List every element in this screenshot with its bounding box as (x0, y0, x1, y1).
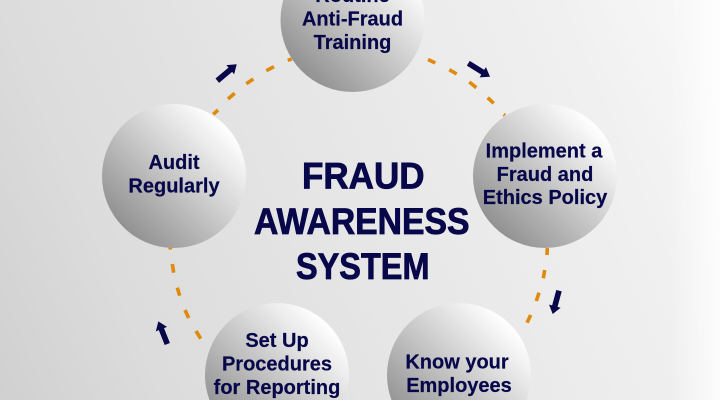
node: routine anti-fraud training (280, 0, 424, 92)
node: audit regularly: Audit (148, 152, 200, 174)
node: implement policy: Ethics Policy (483, 187, 608, 209)
node: implement policy: Implement a (486, 140, 603, 162)
title: FRAUD (302, 156, 424, 196)
node: set up procedures: for Reporting (214, 377, 340, 399)
dashed cycle ring (170, 59, 547, 339)
node: set up procedures: Set Up (245, 330, 309, 352)
arrow: bottom left (153, 319, 173, 346)
arrow: top right (465, 58, 493, 82)
node: know your employees (387, 303, 531, 400)
title: SYSTEM (296, 246, 430, 287)
node: set up procedures: Procedures (222, 354, 332, 376)
title: AWARENESS (254, 201, 470, 242)
title (254, 156, 470, 287)
node: audit regularly: Regularly (128, 176, 220, 198)
node: set up procedures (205, 303, 349, 400)
arrow: right (547, 289, 565, 316)
arrow: top left (213, 60, 241, 85)
node: routine anti-fraud training: Training (314, 32, 391, 54)
node: know your employees: Know your (405, 352, 509, 374)
node: implement policy (473, 104, 617, 248)
node: routine anti-fraud training: Anti-Fraud (302, 8, 403, 30)
node: know your employees: Employees (406, 375, 512, 397)
node: implement policy: Fraud and (497, 164, 593, 186)
node: audit regularly (102, 104, 246, 248)
